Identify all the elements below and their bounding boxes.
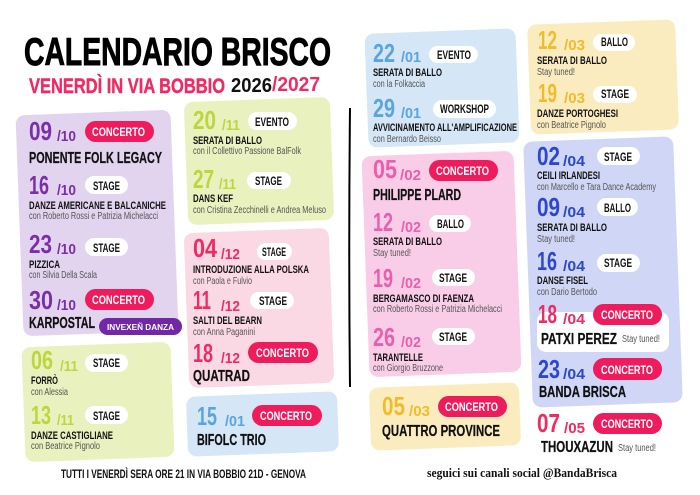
center divider line (348, 108, 351, 387)
event: 05/02: CONCERTO (436, 164, 489, 178)
event: 02/04: /04 (563, 153, 586, 170)
event: 06/11: 06 (31, 345, 53, 375)
subtitle: /2027 (272, 74, 320, 96)
event: 22/01 (373, 38, 478, 90)
event: 12/03: Stay tuned! (537, 67, 575, 78)
event: 12/03: 12 (538, 25, 557, 55)
event: 18/04: CONCERTO (601, 308, 653, 322)
event: 23/10: /10 (57, 241, 76, 258)
event: 26/02: STAGE (439, 330, 467, 344)
event: 02/04: STAGE (604, 150, 632, 164)
event: 13/11: STAGE (93, 409, 120, 423)
event: 15/01: CONCERTO (260, 409, 312, 423)
event: 12/03: BALLO (601, 35, 628, 49)
event: 16/04: /04 (563, 258, 586, 275)
event: 04/12 (193, 233, 309, 287)
subtitle: 2026 (231, 75, 272, 97)
event: 11/12: con Anna Paganini (193, 327, 255, 338)
event: 11/12: /12 (221, 298, 240, 315)
event: 18/04: /04 (563, 311, 586, 328)
footer: social: seguici sui canali social @BandaBrisca (427, 466, 618, 480)
event: 16/10: 16 (29, 170, 49, 200)
event: 20/11: 20 (193, 105, 216, 135)
panel: novembre 06-13 (21, 342, 175, 462)
event: 05/02: 05 (373, 154, 397, 184)
event: 12/02: BALLO (437, 217, 464, 231)
event: 23/04: BANDA BRISCA (539, 384, 626, 401)
event: 29/01 (373, 93, 517, 145)
event: 18/12: CONCERTO (256, 346, 309, 360)
event: 19/02: STAGE (439, 271, 467, 285)
event: 19/02: 19 (373, 263, 393, 293)
event: 23/04: CONCERTO (601, 363, 653, 377)
event: 18/12 (193, 338, 318, 385)
event: 13/11: /11 (57, 412, 74, 429)
badge: Invexen Danza: INVEXEÑ DANZA (107, 323, 174, 332)
event: 12/02: /02 (401, 219, 421, 236)
badge: Invexen Danza (99, 318, 182, 335)
event: 04/12: 04 (193, 233, 217, 263)
event: 02/04: CEILI IRLANDESI (537, 170, 600, 182)
event: 09/10: /10 (57, 128, 76, 145)
panel: dicembre (184, 228, 334, 388)
event: 27/11: con Cristina Zecchinelli e Andrea Meluso (193, 205, 326, 216)
event: 05/02: /02 (400, 167, 421, 184)
event: 15/01: /01 (225, 413, 245, 430)
event: 16/04: con Dario Bertodo (537, 287, 597, 298)
event: 20/11: con il Collettivo Passione BalFolk (193, 146, 302, 157)
event: 13/11 (31, 400, 128, 452)
panel: 05 marzo (369, 382, 521, 451)
panel: 15 gennaio (186, 391, 339, 457)
event: 18/04 (537, 299, 669, 352)
event: 16/04 (537, 246, 640, 298)
event: 16/10: /10 (57, 182, 76, 199)
event: 30/10: CONCERTO (92, 293, 145, 307)
event: 04/12: /12 (221, 246, 240, 263)
event: 07/05: THOUXAZUN (541, 439, 613, 456)
event: 07/05 (537, 408, 662, 456)
event: 22/01: con la Folkaccia (373, 79, 425, 90)
event: 23/10: PIZZICA (29, 259, 60, 271)
footer: address: TUTTI I VENERDÌ SERA ORE 21 IN VIA BOBBIO 21D - GENOVA (61, 468, 306, 481)
event: 09/10: PONENTE FOLK LEGACY (29, 150, 162, 167)
event: 15/01 (197, 401, 322, 449)
event: 06/11: con Alessia (31, 387, 68, 398)
event: 19/03: DANZE PORTOGHESI (537, 108, 618, 120)
event: 07/05: CONCERTO (601, 417, 653, 431)
event: 04/12: INTRODUZIONE ALLA POLSKA (193, 264, 309, 276)
subtitle: VENERDÌ IN VIA BOBBIO (29, 75, 225, 98)
event: 04/12: con Paola e Fulvio (193, 276, 252, 287)
event: 19/02: con Roberto Rossi e Patrizia Michelacci (373, 304, 502, 315)
event: 05/02 (373, 154, 498, 204)
event: 05/03: /03 (409, 403, 430, 420)
event: 27/11: 27 (193, 164, 214, 194)
event: 15/01: BIFOLC TRIO (197, 432, 266, 449)
event: 09/10: CONCERTO (92, 125, 145, 139)
panel: gennaio (364, 28, 520, 148)
event: 20/11: /11 (222, 117, 240, 134)
event: 07/05: Stay tuned! (618, 443, 656, 454)
event: 05/02: PHILIPPE PLARD (373, 187, 461, 204)
event: 18/04: Stay tuned! (622, 334, 660, 345)
event: 09/10 (29, 116, 162, 167)
event: 30/10: /10 (57, 297, 76, 314)
event: 16/04: 16 (537, 246, 557, 276)
event: 05/03: QUATTRO PROVINCE (382, 423, 500, 440)
event: 22/01: 22 (373, 38, 395, 68)
event: 05/03: 05 (382, 391, 405, 421)
event: 19/02 (373, 263, 502, 315)
event: 18/12: QUATRAD (193, 368, 250, 385)
event: 06/11: FORRÒ (31, 374, 58, 387)
event: 11/12: 11 (193, 285, 211, 315)
panel: febbraio (362, 151, 521, 377)
event: 18/04: 18 (538, 299, 557, 329)
event: 13/11: 13 (31, 400, 51, 430)
panel: ottobre (16, 110, 182, 336)
event: 16/10: con Roberto Rossi e Patrizia Michelacci (29, 211, 158, 222)
event: 19/03: STAGE (601, 87, 629, 101)
panel: novembre 20-27 (184, 97, 334, 225)
event: 19/02: BERGAMASCO DI FAENZA (373, 293, 474, 305)
event: 12/02: 12 (373, 207, 393, 237)
event: 12/03 (537, 25, 635, 78)
event: 19/03: con Beatrice Pignolo (537, 120, 606, 131)
event: 02/04 (537, 141, 656, 193)
event: 12/02: SERATA DI BALLO (373, 236, 442, 248)
event: 02/04: con Marcello e Tara Dance Academy (537, 182, 656, 193)
event: 29/01: /01 (401, 105, 421, 122)
event: 11/12: STAGE (259, 294, 287, 308)
event: 20/11: EVENTO (255, 115, 289, 129)
event: 09/04: BALLO (604, 201, 631, 215)
event: 09/04 (537, 192, 638, 245)
event: 07/05: /05 (564, 420, 585, 437)
event: 16/04: DANSE FISEL (537, 275, 588, 287)
event: 16/10: STAGE (93, 179, 120, 193)
event: 27/11: /11 (219, 176, 236, 193)
event: 05/03: CONCERTO (445, 400, 498, 414)
panel: marzo (527, 19, 679, 135)
event: 20/11 (193, 105, 302, 157)
event: 18/12: /12 (221, 350, 240, 367)
event: 19/03: /03 (564, 90, 585, 107)
event: 19/03: 19 (538, 78, 557, 108)
event: 27/11 (193, 164, 326, 216)
event: 27/11: DANS KEF (193, 193, 233, 205)
event: 13/11: con Beatrice Pignolo (31, 441, 100, 452)
event: 09/04: Stay tuned! (537, 234, 575, 245)
event: 23/10 (29, 229, 128, 281)
event: 16/10: DANZE AMERICANE E BALCANICHE (29, 200, 166, 212)
event: 22/01: /01 (401, 49, 421, 66)
event: 23/04: 23 (538, 354, 560, 384)
event: 13/11: DANZE CASTIGLIANE (31, 430, 113, 442)
event: 27/11: STAGE (255, 174, 282, 188)
event: 06/11: /11 (60, 358, 78, 375)
event: 11/12 (193, 285, 294, 338)
event: 23/04 (538, 354, 662, 401)
event: 26/02: con Giorgio Bruzzone (373, 363, 443, 374)
event: 18/04: PATXI PEREZ (541, 331, 617, 348)
event: 20/11: SERATA DI BALLO (193, 135, 262, 147)
event: 12/02 (373, 207, 471, 259)
event: 09/10: 09 (29, 116, 52, 146)
event: 18/12: 18 (193, 338, 213, 368)
event: 12/03: /03 (564, 37, 585, 54)
event: 22/01: SERATA DI BALLO (373, 67, 442, 79)
event: 09/04: 09 (537, 192, 560, 222)
event: 06/11: STAGE (93, 356, 120, 370)
event: 02/04: 02 (537, 141, 560, 171)
event: 23/10: STAGE (93, 241, 120, 255)
event: 30/10 (29, 285, 154, 332)
event: 15/01: 15 (197, 401, 217, 431)
event: 26/02: /02 (401, 334, 421, 351)
event: 06/11 (31, 345, 128, 398)
event: 23/04: /04 (563, 366, 586, 383)
event: 29/01: AVVICINAMENTO ALL'AMPLIFICAZIONE (373, 122, 517, 134)
event: 09/04: SERATA DI BALLO (537, 222, 607, 234)
event: 26/02: TARANTELLE (373, 352, 423, 364)
panel: aprile (523, 136, 683, 408)
event: 11/12: SALTI DEL BEARN (193, 315, 262, 327)
event: 05/03 (382, 391, 507, 440)
event: 09/04: /04 (563, 204, 586, 221)
event: 30/10: 30 (29, 285, 53, 315)
event: 29/01: WORKSHOP (440, 102, 489, 116)
event: 19/03 (537, 78, 637, 131)
event: 19/02: /02 (401, 275, 421, 292)
event: 12/03: SERATA DI BALLO (537, 55, 607, 67)
event: 04/12: STAGE (262, 245, 286, 259)
event: 26/02 (373, 322, 475, 374)
event: 12/02: Stay tuned! (373, 248, 411, 259)
event: 16/04: STAGE (604, 256, 632, 270)
event: 29/01: 29 (373, 93, 395, 123)
event: 26/02: 26 (373, 322, 395, 352)
event: 07/05: 07 (537, 408, 560, 438)
event: 22/01: EVENTO (437, 48, 471, 62)
event: 29/01: con Bernardo Beisso (373, 134, 441, 145)
event: 23/10: 23 (29, 229, 52, 259)
title: CALENDARIO BRISCO (24, 31, 331, 74)
event: 30/10: KARPOSTAL (29, 315, 95, 332)
event: 23/10: con Silvia Della Scala (29, 270, 97, 281)
event: 16/10 (29, 170, 166, 222)
